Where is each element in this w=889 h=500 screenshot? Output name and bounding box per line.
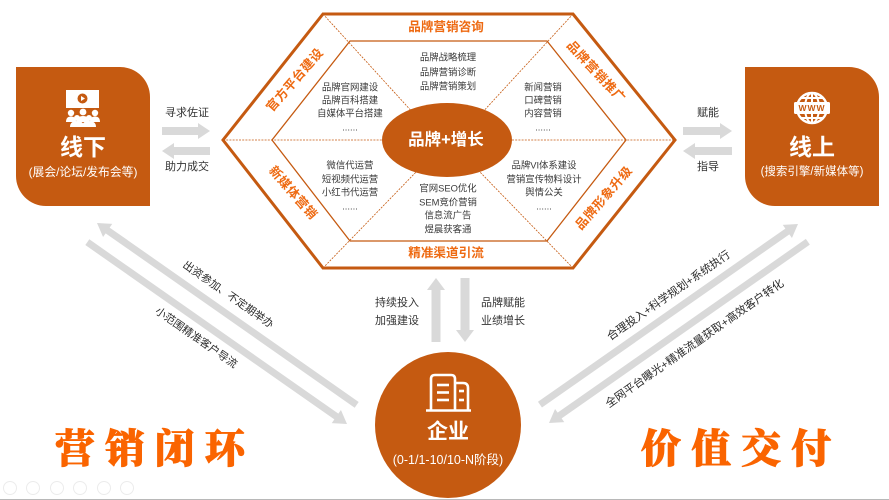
text block: lower right segment: 品牌VI体系建设 <box>511 160 577 170</box>
panel: enterprise circle: 企业 <box>427 420 469 444</box>
heading: brand promotion: 品牌营销推广 <box>564 38 629 106</box>
text block: lower right segment: 舆情公关 <box>525 186 563 198</box>
label: brand empowerment: 业绩增长 <box>481 313 525 327</box>
text block: upper right segment: ...... <box>535 122 551 132</box>
label: help close: 助力成交 <box>165 159 209 173</box>
center ellipse: brand + growth: 品牌+增长 <box>408 130 484 149</box>
arrow: enterprise to online <box>535 217 803 411</box>
text block: upper left segment: 自媒体平台搭建 <box>317 108 383 118</box>
label: continued investment: 持续投入 <box>375 295 419 309</box>
label: reasonable investment: 合理投入+科学规划+系统执行 <box>604 247 733 343</box>
icon: buildings <box>426 375 471 410</box>
text block: lower right segment <box>506 160 582 212</box>
heading: new media: 新媒体营销 <box>266 163 321 222</box>
icon: www globe: WWW <box>798 103 826 113</box>
text block: lower left segment <box>322 160 378 212</box>
text block: lower right segment: 营销宣传物料设计 <box>506 174 582 184</box>
text block: bottom segment: 官网SEO优化 <box>419 182 477 194</box>
arrow: online to enterprise <box>544 235 812 430</box>
title: marketing loop: 营销闭环 <box>55 418 255 474</box>
text block: lower left segment: ...... <box>342 200 358 212</box>
heading: brand consulting: 品牌营销咨询 <box>408 19 484 34</box>
text block: bottom segment: 信息流广告 <box>425 210 471 220</box>
text block: top segment: 品牌战略梳理 <box>420 52 477 62</box>
text block: upper right segment: 内容营销 <box>524 108 562 118</box>
heading: official platform: 官方平台建设 <box>263 45 326 114</box>
panel: online <box>745 67 879 206</box>
panel: offline: 线下 <box>60 134 106 160</box>
text block: upper right segment: 口碑营销 <box>524 94 562 106</box>
text block: bottom segment: SEM竞价营销 <box>419 196 477 208</box>
label: continued investment: 加强建设 <box>375 313 419 327</box>
label: small scale leads: 小范围精准客户导流 <box>153 304 241 371</box>
text block: upper right segment <box>524 82 562 132</box>
label: seek proof: 寻求佐证 <box>165 105 209 119</box>
text block: lower left segment: 小红书代运营 <box>322 186 378 198</box>
text block: lower left segment: 短视频代运营 <box>322 174 378 184</box>
panel: offline <box>16 67 150 206</box>
text block: upper left segment <box>317 82 383 132</box>
text block: upper right segment: 新闻营销 <box>524 82 562 92</box>
panel: offline: (展会/论坛/发布会等) <box>29 165 137 179</box>
label: continued investment <box>375 295 419 327</box>
arrows: offline exchange <box>162 123 210 159</box>
label: empower: 赋能 <box>697 105 719 119</box>
label: full network exposure: 全网平台曝光+精准流量获取+高效客户转化 <box>603 276 786 410</box>
text block: top segment <box>420 52 477 92</box>
panel: online: (搜索引擎/新媒体等) <box>761 164 864 178</box>
heading: precise channel: 精准渠道引流 <box>408 245 484 260</box>
text block: top segment: 品牌营销诊断 <box>420 66 476 78</box>
panel: enterprise circle: (0-1/1-10/10-N阶段) <box>393 452 503 467</box>
text block: upper left segment: 品牌百科搭建 <box>322 94 378 106</box>
text block: bottom segment <box>419 182 477 234</box>
text block: bottom segment: 煜晨获客通 <box>425 224 472 234</box>
label: brand empowerment: 品牌赋能 <box>481 295 525 309</box>
icon: screening audience <box>66 90 100 127</box>
arrows: vertical exchange <box>427 278 474 342</box>
center ellipse: brand + growth <box>382 103 512 177</box>
text block: lower left segment: 微信代运营 <box>327 160 373 170</box>
arrow: offline to enterprise <box>83 236 352 431</box>
title: value delivery: 价值交付 <box>641 418 841 474</box>
label: sponsorship: 出资参加、不定期举办 <box>180 257 277 331</box>
label: guide: 指导 <box>697 159 719 173</box>
panel: enterprise circle <box>375 352 521 498</box>
hexagon diagram <box>223 14 675 268</box>
heading: brand image: 品牌形象升级 <box>572 163 635 232</box>
arrow: enterprise to offline <box>92 216 361 411</box>
text block: lower right segment: ...... <box>536 200 552 212</box>
text block: upper left segment: 品牌官网建设 <box>322 82 379 92</box>
slideshow toolbar icons <box>4 482 134 494</box>
arrows: online exchange <box>683 123 732 159</box>
panel: online: 线上 <box>789 134 835 160</box>
text block: top segment: 品牌营销策划 <box>420 80 476 92</box>
label: brand empowerment <box>481 295 525 327</box>
text block: upper left segment: ...... <box>342 122 358 132</box>
